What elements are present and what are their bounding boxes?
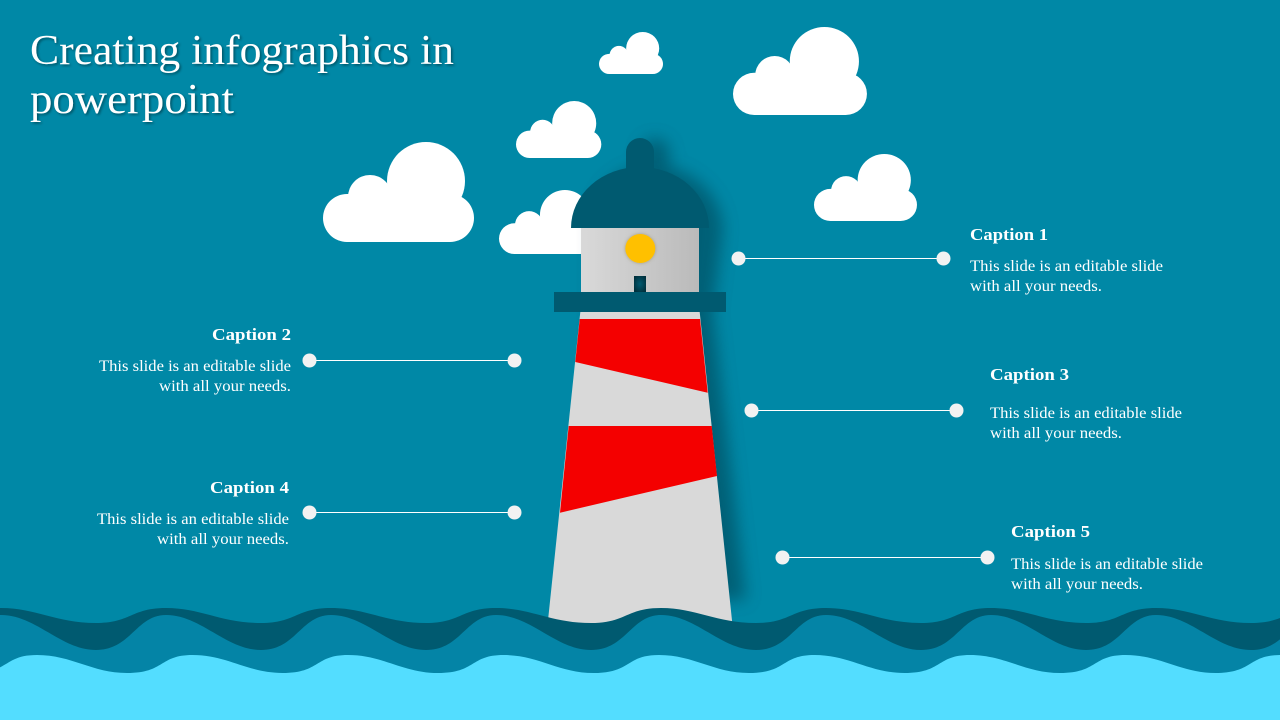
caption 3 heading: Caption 3 xyxy=(990,365,1069,384)
dome xyxy=(571,167,709,228)
title: powerpoint xyxy=(30,77,234,123)
cloud: right xyxy=(814,154,917,221)
caption 5 text xyxy=(1011,556,1203,593)
lighthouse shadow xyxy=(593,138,746,600)
window xyxy=(634,276,646,292)
lighthouse xyxy=(547,138,746,630)
caption 4 text: with all your needs. xyxy=(157,531,289,548)
caption 5 heading: Caption 5 xyxy=(1011,522,1090,541)
caption 1 heading: Caption 1 xyxy=(970,225,1048,244)
caption 2 heading: Caption 2 xyxy=(212,325,291,344)
clouds xyxy=(323,27,917,254)
connector 5 xyxy=(776,550,994,564)
cloud: small centre xyxy=(516,101,601,158)
dome knob xyxy=(626,138,654,170)
title xyxy=(30,28,454,123)
connector 4 xyxy=(302,506,522,520)
caption 1 text xyxy=(970,258,1163,295)
caption 4 xyxy=(97,478,522,548)
caption 1 xyxy=(732,225,1163,295)
caption 5 text: This slide is an editable slide xyxy=(1011,556,1203,573)
caption 2 text xyxy=(99,358,291,395)
caption 4 text: This slide is an editable slide xyxy=(97,511,289,528)
lantern room xyxy=(581,228,699,292)
caption 5 text: with all your needs. xyxy=(1011,576,1143,593)
connector 2 xyxy=(302,354,522,368)
caption 2 text: with all your needs. xyxy=(159,378,291,395)
caption 3 xyxy=(744,365,1182,442)
caption 5 xyxy=(776,522,1203,593)
cloud: top right large xyxy=(733,27,867,115)
cloud: top small xyxy=(599,32,663,74)
red stripe lower xyxy=(560,426,717,513)
caption 3 text: with all your needs. xyxy=(990,425,1122,442)
caption 4 text xyxy=(97,511,289,548)
red stripe upper xyxy=(575,319,708,393)
caption 3 text: This slide is an editable slide xyxy=(990,405,1182,422)
title: Creating infographics in xyxy=(30,28,454,74)
tower body xyxy=(547,312,733,630)
mid sea wave xyxy=(0,615,1280,720)
caption 3 text xyxy=(990,405,1182,442)
connector 1 xyxy=(732,252,950,266)
caption 4 heading: Caption 4 xyxy=(210,478,290,497)
gallery platform xyxy=(554,292,726,312)
cloud: behind lighthouse xyxy=(499,190,596,254)
connector 3 xyxy=(744,404,964,418)
cloud: large left xyxy=(323,142,474,242)
caption 1 text: with all your needs. xyxy=(970,278,1102,295)
caption 1 text: This slide is an editable slide xyxy=(970,258,1163,275)
lamp xyxy=(625,234,655,263)
caption 2 text: This slide is an editable slide xyxy=(99,358,291,375)
light foreground wave xyxy=(0,655,1280,720)
dark wave xyxy=(0,608,1280,720)
caption 2 xyxy=(99,325,522,395)
